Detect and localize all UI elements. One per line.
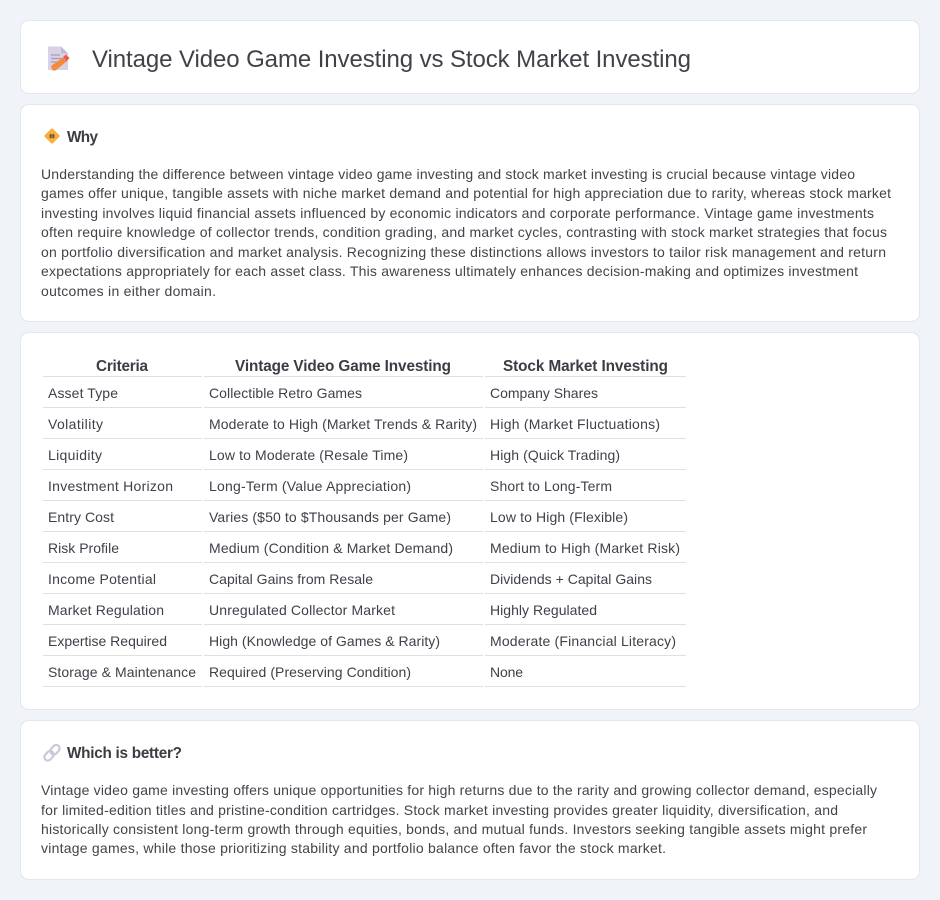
row: liquidity: High (Quick Trading) (490, 447, 620, 463)
row: entry cost (48, 509, 628, 525)
title: Vintage Video Game Investing vs Stock Market Investing (92, 46, 691, 73)
row: income potential (48, 571, 652, 587)
row: asset type: Company Shares (490, 385, 598, 401)
text block: which is better paragraph: Vintage video game investing offers unique opportunities for high returns due to the rarity and growing collector demand, especially (41, 782, 877, 798)
row: investment horizon: Investment Horizon (48, 478, 173, 494)
row: storage and maintenance: Required (Preserving Condition) (209, 664, 411, 680)
table header row (96, 358, 668, 375)
row: investment horizon: Short to Long-Term (490, 478, 612, 494)
row: expertise required: Expertise Required (48, 633, 167, 649)
panel: why (20, 104, 920, 322)
row: entry cost: Low to High (Flexible) (490, 509, 628, 525)
row: volatility: Moderate to High (Market Trends & Rarity) (209, 416, 477, 432)
text block: which is better paragraph: vintage games, while those prioritizing stability and portfolio balance often favor the stock market. (41, 840, 666, 856)
row: investment horizon: Long-Term (Value Appreciation) (209, 478, 411, 494)
row: asset type: Collectible Retro Games (209, 385, 362, 401)
row: expertise required: High (Knowledge of Games & Rarity) (209, 633, 440, 649)
text block: which is better paragraph: historically consistent long-term growth through equities, bonds, and mutual funds. Investors seeking tangible assets might prefer (41, 821, 867, 837)
row: storage and maintenance: None (490, 664, 523, 680)
row: liquidity: Liquidity (48, 447, 102, 463)
text block: why paragraph: games offer unique, tangible assets with niche market demand and potential for high appreciation due to rarity, whereas stock market (41, 185, 891, 201)
row: liquidity: Low to Moderate (Resale Time) (209, 447, 408, 463)
row: volatility: High (Market Fluctuations) (490, 416, 660, 432)
panel: title header (20, 20, 920, 94)
row: entry cost: Varies ($50 to $Thousands per Game) (209, 509, 451, 525)
row: income potential: Income Potential (48, 571, 156, 587)
text block: why paragraph: on portfolio diversification and market analysis. Recognizing these distinctions allows investors to tailor risk management and return (41, 244, 886, 260)
text block: why paragraph: expectations appropriately for each asset class. This awareness ultimately enhances decision-making and optimizes investment (41, 263, 858, 279)
row: storage and maintenance (48, 664, 523, 680)
row: asset type (48, 385, 598, 401)
icon: orange diamond sign (44, 128, 60, 144)
table header row: Vintage Video Game Investing (235, 358, 451, 375)
row: asset type: Asset Type (48, 385, 118, 401)
text block: why paragraph (41, 166, 891, 299)
text block: why paragraph: Understanding the difference between vintage video game investing and stock market investing is crucial because vintage video (41, 166, 855, 182)
row: market regulation: Highly Regulated (490, 602, 597, 618)
panel: which is better (20, 720, 920, 880)
text block: which is better paragraph: for limited-edition titles and pristine-condition cartridges. Stock market investing provides greater liquidity, diversification, and (41, 802, 838, 818)
text block: why paragraph: often require knowledge of collector trends, condition grading, and market cycles, contrasting with stock market strategies that focus (41, 224, 887, 240)
row: expertise required (48, 633, 676, 649)
row: income potential: Capital Gains from Resale (209, 571, 373, 587)
heading: which is better: Which is better? (67, 745, 182, 762)
row: storage and maintenance: Storage & Maintenance (48, 664, 196, 680)
row: market regulation: Market Regulation (48, 602, 164, 618)
row: volatility: Volatility (48, 416, 103, 432)
row: market regulation (48, 602, 597, 618)
icon: document with pencil (48, 46, 70, 70)
row: risk profile: Risk Profile (48, 540, 119, 556)
row: volatility (48, 416, 660, 432)
row: entry cost: Entry Cost (48, 509, 114, 525)
panel: comparison table (20, 332, 920, 710)
table header row: Criteria (96, 358, 148, 375)
text block: why paragraph: outcomes in either domain. (41, 283, 216, 299)
table header row: Stock Market Investing (503, 358, 668, 375)
row: liquidity (48, 447, 620, 463)
row: investment horizon (48, 478, 612, 494)
heading: why: Why (67, 129, 98, 146)
icon: chain link (43, 744, 61, 762)
row: risk profile: Medium (Condition & Market Demand) (209, 540, 453, 556)
row: market regulation: Unregulated Collector Market (209, 602, 395, 618)
text block: which is better paragraph (41, 782, 877, 856)
row: risk profile: Medium to High (Market Risk) (490, 540, 680, 556)
row: expertise required: Moderate (Financial Literacy) (490, 633, 676, 649)
row: risk profile (48, 540, 680, 556)
text block: why paragraph: investing involves liquid financial assets influenced by economic indicators and corporate performance. Vintage game investments (41, 205, 874, 221)
row: income potential: Dividends + Capital Gains (490, 571, 652, 587)
